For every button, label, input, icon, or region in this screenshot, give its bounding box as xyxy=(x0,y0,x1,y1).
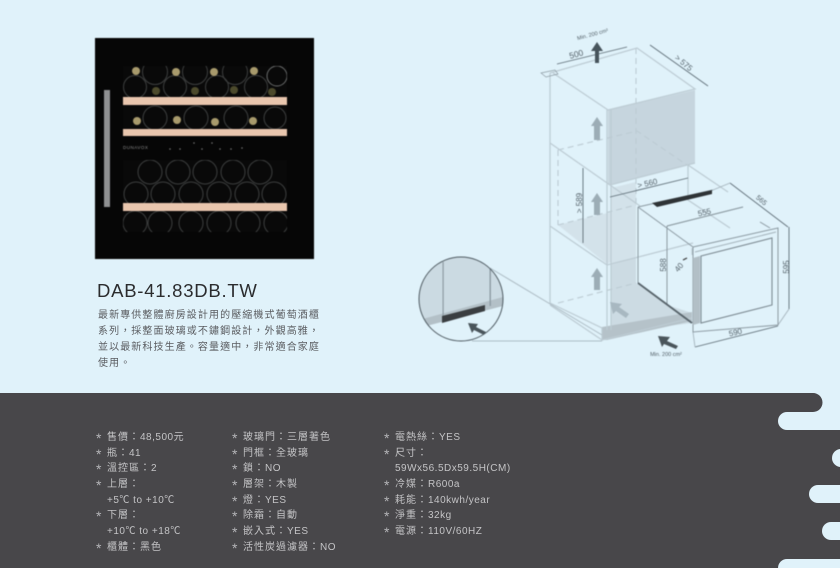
spec list: column 3: 耗能：140kwh/year xyxy=(395,495,490,506)
appliance xyxy=(638,190,778,332)
spec list: column 2 xyxy=(232,431,336,553)
spec list: column 2: 活性炭過濾器：NO xyxy=(243,542,336,553)
spec list: column 1 xyxy=(96,431,185,553)
spec list: column 1: +5℃ to +10℃ xyxy=(107,495,175,506)
description: 使用。 xyxy=(98,358,131,369)
product photo: wine cabinet: DUNAVOX xyxy=(123,145,148,150)
spec list: column 2: 玻璃門：三層著色 xyxy=(243,432,331,443)
installation diagram xyxy=(418,28,790,357)
spec list: column 2: 門框：全玻璃 xyxy=(243,448,309,459)
spec list: column 3: 電源：110V/60HZ xyxy=(395,526,482,537)
installation diagram: > 575 xyxy=(673,53,695,73)
installation diagram: 40 xyxy=(673,261,686,274)
cabinet handle xyxy=(104,90,110,207)
spec list: column 2: 燈：YES xyxy=(243,495,287,506)
installation diagram: 588 xyxy=(659,258,668,272)
spec list: column 2: 鎖：NO xyxy=(243,463,281,474)
installation diagram: 595 xyxy=(782,260,791,274)
description: 系列，採整面玻璃或不鏽鋼設計，外觀高雅， xyxy=(98,326,320,337)
upper cabinet outline xyxy=(541,48,730,340)
description: 最新專供整體廚房設計用的壓縮機式葡萄酒櫃 xyxy=(98,310,320,321)
spec list: column 3: 電熱絲：YES xyxy=(395,432,461,443)
spec list: column 1: 售價：48,500元 xyxy=(107,432,185,443)
spec list: column 2: 除霜：自動 xyxy=(243,510,298,521)
installation diagram: > 560 xyxy=(637,177,659,190)
spec list: column 2: 嵌入式：YES xyxy=(243,526,309,537)
top dimensions xyxy=(557,45,789,347)
installation diagram: Min. 200 cm² xyxy=(577,28,609,42)
description: 並以最新科技生產。容量適中，非常適合家庭 xyxy=(98,342,320,353)
magnified detail xyxy=(419,257,602,341)
product photo: wine cabinet xyxy=(94,37,315,260)
shaded cavity panels xyxy=(558,90,695,340)
spec list: column 3: 59Wx56.5Dx59.5H(CM) xyxy=(395,463,511,474)
installation diagram: > 589 xyxy=(575,192,584,213)
installation diagram: 565 xyxy=(754,194,768,207)
installation diagram: 590 xyxy=(728,327,743,338)
airflow arrows xyxy=(591,42,678,349)
spec list: column 1: 瓶：41 xyxy=(107,448,141,459)
spec list: column 3: 尺寸： xyxy=(395,448,428,459)
spec list: column 2: 層架：木製 xyxy=(243,479,298,490)
installation diagram: Min. 200 cm² xyxy=(650,352,682,358)
spec list: column 1: 櫃體：黑色 xyxy=(107,542,162,553)
spec list: column 3: 淨重：32kg xyxy=(395,510,452,521)
spec list: column 1: 下層： xyxy=(107,510,140,521)
spec list: column 1: 溫控區：2 xyxy=(107,463,157,474)
spec list: column 3: 冷媒：R600a xyxy=(395,479,460,490)
spec list: column 1: 上層： xyxy=(107,479,140,490)
installation diagram: 500 xyxy=(568,47,585,61)
dashed rear edges xyxy=(558,48,687,303)
spec list: column 3 xyxy=(384,431,511,537)
installation diagram: 555 xyxy=(697,207,712,218)
title: DAB-41.83DB.TW xyxy=(97,280,258,301)
spec list: column 1: +10℃ to +18℃ xyxy=(107,526,181,537)
description xyxy=(98,309,320,369)
